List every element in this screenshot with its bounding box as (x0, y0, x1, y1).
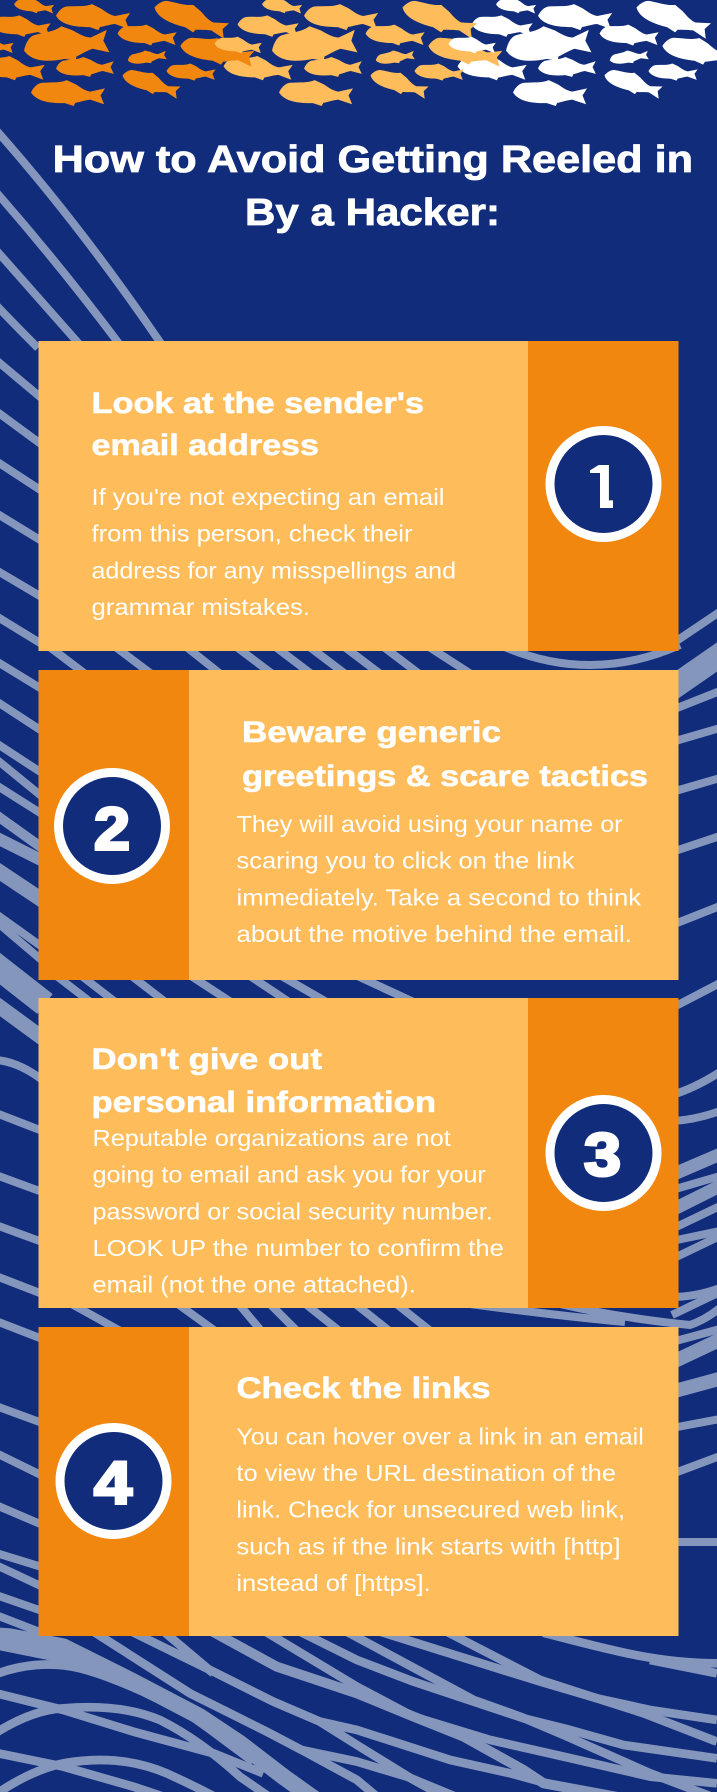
heading 3 (92, 1043, 436, 1119)
body 1 (92, 484, 456, 620)
number badge 1 (550, 430, 657, 538)
panel: step 4 (38, 1327, 678, 1636)
body 4: link. Check for unsecured web link, (236, 1497, 625, 1523)
body 1: grammar mistakes. (92, 594, 310, 620)
fish school: orange (0, 0, 255, 107)
small overlapping fish (214, 36, 496, 54)
heading 4: Check the links (236, 1372, 490, 1405)
body 4: instead of [https]. (236, 1570, 431, 1596)
number band 4 (38, 1327, 189, 1636)
panel: step 3 (38, 998, 678, 1308)
title (53, 139, 693, 234)
title: How to Avoid Getting Reeled in (53, 139, 693, 181)
number band 1 (528, 341, 678, 651)
heading 2: greetings & scare tactics (242, 760, 648, 793)
title: By a Hacker: (245, 192, 500, 234)
heading 1: Look at the sender's (92, 387, 424, 420)
heading 2: Beware generic (242, 716, 501, 749)
body 4: to view the URL destination of the (236, 1460, 616, 1486)
body 2 (236, 811, 642, 947)
body 4 (236, 1423, 644, 1596)
body 3: email (not the one attached). (92, 1272, 416, 1298)
body 1: If you're not expecting an email (92, 484, 444, 510)
number badge 2 (58, 772, 166, 880)
heading 3: Don't give out (92, 1043, 322, 1076)
number badge 2: 2 (94, 796, 130, 862)
right strip (660, 1150, 717, 1180)
bottom net lines (0, 1628, 717, 1792)
body 1: from this person, check their (92, 521, 413, 547)
body 4: You can hover over a link in an email (236, 1423, 644, 1449)
body 3: LOOK UP the number to confirm the (92, 1235, 504, 1261)
body 3 (92, 1125, 504, 1298)
body 2: immediately. Take a second to think (236, 884, 642, 910)
fish school: gold (214, 0, 503, 107)
heading 2 (242, 716, 648, 793)
panel: step 2 (38, 670, 678, 980)
gap two (54, 974, 418, 1004)
body 3: Reputable organizations are not (92, 1125, 451, 1151)
panel: step 1 (38, 341, 678, 651)
number badge 4: 4 (94, 1450, 133, 1516)
number badge 1: 1 (584, 454, 619, 521)
heading 1 (92, 387, 424, 462)
body 1: address for any misspellings and (92, 557, 456, 583)
gap three (68, 1302, 433, 1333)
heading 3: personal information (92, 1086, 436, 1119)
body 4: such as if the link starts with [http] (236, 1533, 620, 1559)
number badge 4 (60, 1428, 167, 1534)
body 2: scaring you to click on the link (236, 848, 575, 874)
number band 2 (38, 670, 189, 980)
number badge 3 (550, 1100, 657, 1206)
gap one (47, 645, 474, 676)
fish school: white (448, 0, 717, 107)
body 2: They will avoid using your name or (236, 811, 623, 837)
body 2: about the motive behind the email. (236, 921, 632, 947)
body 3: password or social security number. (92, 1198, 493, 1224)
heading 1: email address (92, 429, 319, 462)
number badge 3: 3 (584, 1122, 621, 1188)
number band 3 (528, 998, 678, 1308)
body 3: going to email and ask you for your (92, 1162, 486, 1188)
